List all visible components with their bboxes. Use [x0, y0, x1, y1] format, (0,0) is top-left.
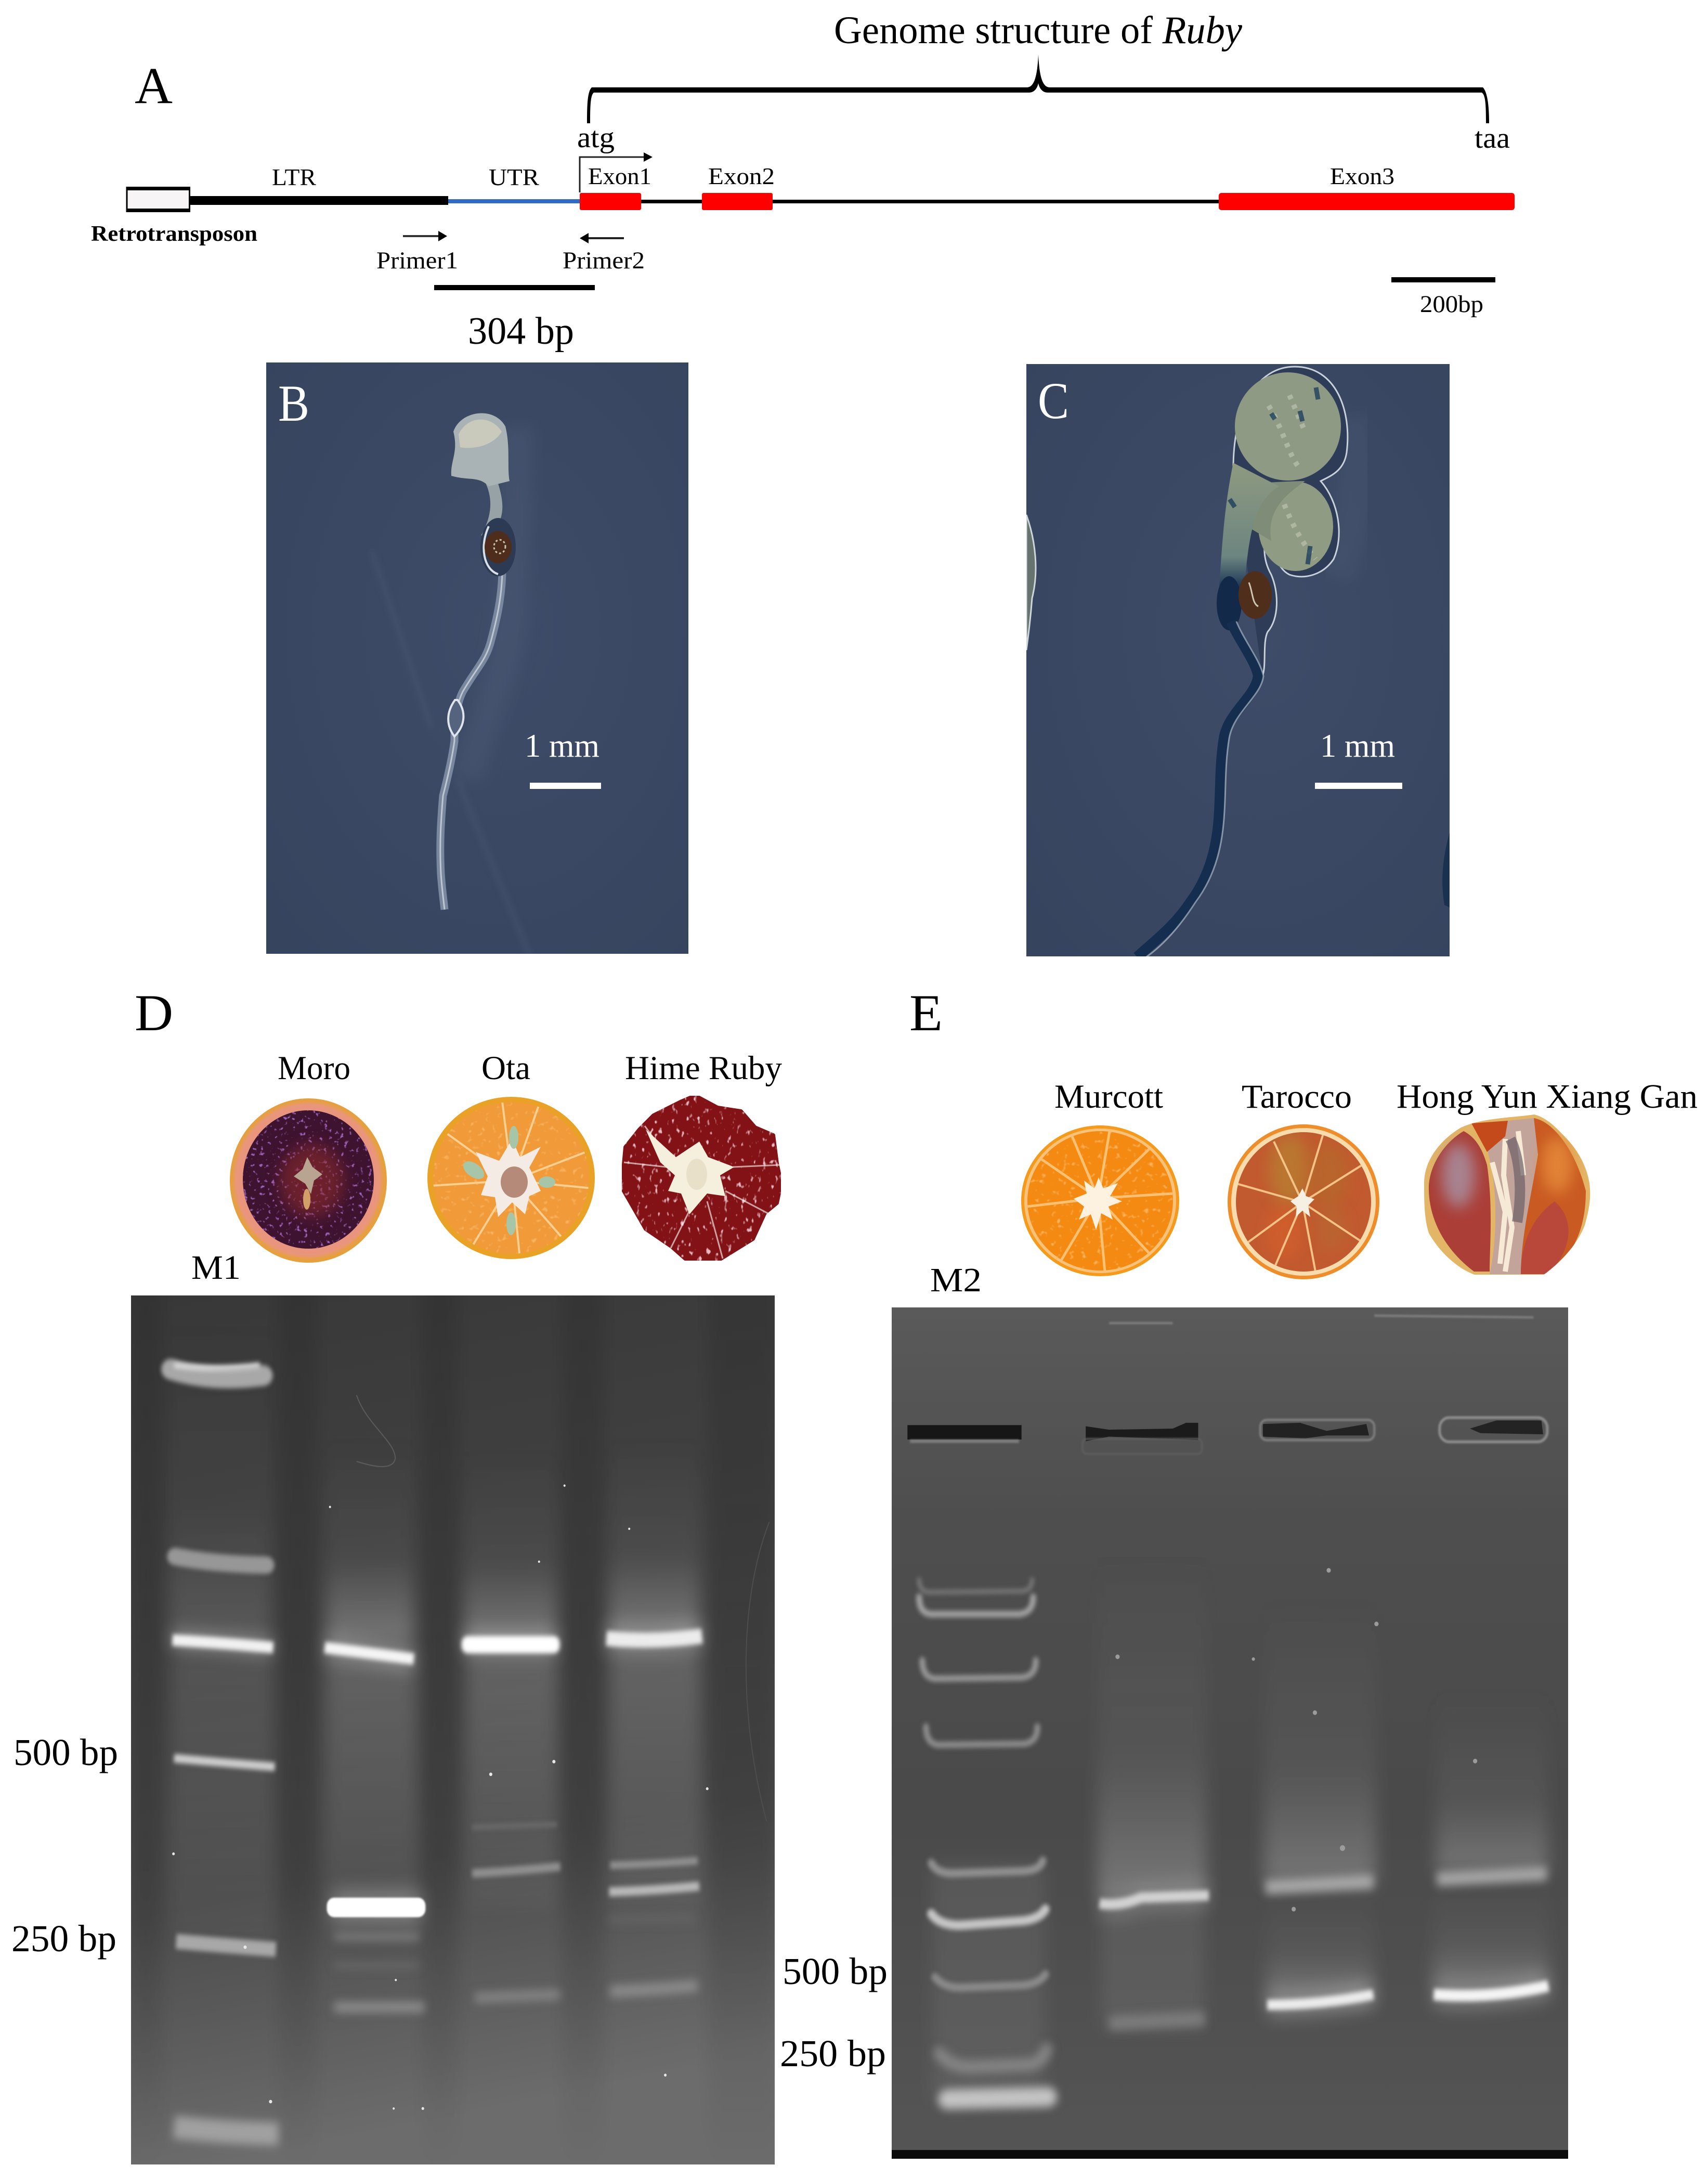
- gel D: electrophoresis image: [130, 1274, 777, 2173]
- marker ladder M2: [919, 1579, 1048, 2099]
- hypocotyl: [1219, 463, 1279, 588]
- amplicon bar: [434, 285, 595, 290]
- label Murcott: Murcott: [1054, 1078, 1163, 1116]
- amplicon length label: 304 bp: [468, 310, 574, 353]
- fruit: Moro blood orange: [230, 1098, 387, 1263]
- panel A: gene structure diagram: [91, 9, 1515, 353]
- panel letter D: D: [135, 984, 173, 1042]
- fruit: Murcott: [1021, 1125, 1179, 1276]
- lane 2 bands: [462, 1636, 560, 1998]
- label Hong Yun Xiang Gan: Hong Yun Xiang Gan: [1397, 1078, 1698, 1116]
- lower cotyledon: [1258, 482, 1333, 571]
- intron line: [641, 200, 1219, 203]
- label M1: M1: [191, 1249, 241, 1287]
- UTR bar: [448, 199, 580, 203]
- scale bar: [530, 783, 601, 789]
- lane 1 bands: [1100, 1895, 1209, 2023]
- fruit: Hong Yun Xiang Gan: [1419, 1113, 1596, 1279]
- transcription start arrow: [580, 152, 653, 192]
- panel C: GUS-stained seedling photo: [1026, 364, 1450, 957]
- segment gaps: [624, 1126, 780, 1259]
- specks: [1115, 1568, 1477, 1911]
- white pith star: [646, 1130, 734, 1214]
- seeds: [460, 1126, 555, 1235]
- GUS stain spots: [1230, 387, 1318, 564]
- label M2: M2: [930, 1261, 982, 1299]
- label Exon3: Exon3: [1330, 163, 1394, 189]
- label Retrotransposon: Retrotransposon: [91, 222, 257, 246]
- right orange flesh: [1521, 1118, 1586, 1274]
- exon 3: [1219, 193, 1515, 210]
- lane gaps: [130, 1274, 777, 2173]
- label Hime Ruby: Hime Ruby: [625, 1049, 782, 1087]
- lane 2 bands: [1266, 1882, 1373, 2005]
- retrotransposon box: [126, 187, 190, 212]
- label Ota: Ota: [481, 1049, 530, 1087]
- top edge streaks: [1109, 1316, 1533, 1323]
- fruit: Ota orange: [427, 1097, 595, 1259]
- seedling: [440, 413, 518, 910]
- neighbouring seedling fragments: [1026, 515, 1036, 650]
- marker size label: gel E 500 bp: 500 bp: [783, 1950, 888, 1992]
- panel letter C: C: [1038, 372, 1069, 430]
- blue hypocotyl blot: [1217, 576, 1242, 630]
- scale label: 1 mm: [525, 727, 599, 764]
- heading: genome structure of Ruby: Genome structure of Ruby: [834, 9, 1243, 52]
- wells: [907, 1418, 1547, 1454]
- hypocotyl and shoot tip: [481, 478, 502, 536]
- label Moro: Moro: [278, 1049, 350, 1087]
- label UTR: UTR: [489, 164, 539, 190]
- root: [440, 572, 502, 910]
- label Exon1: Exon1: [588, 163, 651, 189]
- panel B: unstained seedling photo: [266, 362, 688, 957]
- primer 1 arrow: [403, 231, 447, 241]
- marker ladder M1: [171, 1365, 279, 2134]
- exon 2: [702, 193, 773, 210]
- bracket spanning the Ruby gene: [587, 55, 1489, 123]
- scale bar: [1315, 783, 1402, 789]
- seedling with blue root: [1026, 367, 1450, 957]
- label Primer1: Primer1: [376, 247, 458, 274]
- leaf highlights: [1269, 395, 1315, 559]
- lane 1 bands: [324, 1648, 425, 2007]
- fruit: Hime Ruby: [622, 1096, 781, 1261]
- lane 3 bands: [606, 1636, 702, 1991]
- specks: [172, 1484, 709, 2110]
- exon 1: [580, 193, 641, 210]
- scale bar: [1391, 277, 1495, 282]
- panel letter E: E: [909, 984, 943, 1042]
- white outline halo: [1233, 367, 1348, 676]
- stop codon label: taa: [1475, 122, 1510, 154]
- gel E: electrophoresis image: [889, 1307, 1573, 2161]
- panel letter A: A: [135, 57, 173, 114]
- start codon label: atg: [577, 122, 615, 154]
- label Exon2: Exon2: [708, 163, 775, 189]
- fruit: Tarocco: [1228, 1124, 1379, 1279]
- label Primer2: Primer2: [563, 247, 645, 274]
- label Tarocco: Tarocco: [1242, 1078, 1352, 1116]
- lane glows: [170, 1308, 699, 1942]
- marker size label: gel E 250 bp: 250 bp: [780, 2032, 886, 2075]
- LTR bar: [190, 196, 448, 205]
- upper cotyledon: [1235, 372, 1341, 481]
- stained root: [1137, 621, 1258, 957]
- seed and halo: [480, 518, 516, 576]
- left red-purple flesh: [1429, 1131, 1491, 1272]
- panel letter B: B: [278, 374, 309, 432]
- lane 3 bands: [1434, 1873, 1548, 1995]
- marker size label: gel D 500 bp: 500 bp: [14, 1731, 118, 1773]
- scale label: 200bp: [1420, 291, 1483, 318]
- bottom edge: [889, 2150, 1573, 2161]
- marker size label: gel D 250 bp: 250 bp: [11, 1917, 116, 1960]
- hair artefact: [357, 1395, 395, 1467]
- scale label: 1 mm: [1320, 727, 1395, 764]
- centre membranes: [1482, 1118, 1539, 1274]
- seed: [1238, 571, 1272, 619]
- faint scratches: [372, 551, 530, 957]
- label LTR: LTR: [272, 164, 316, 190]
- lane smears: [932, 1551, 1549, 2104]
- primer 2 arrow: [580, 233, 624, 243]
